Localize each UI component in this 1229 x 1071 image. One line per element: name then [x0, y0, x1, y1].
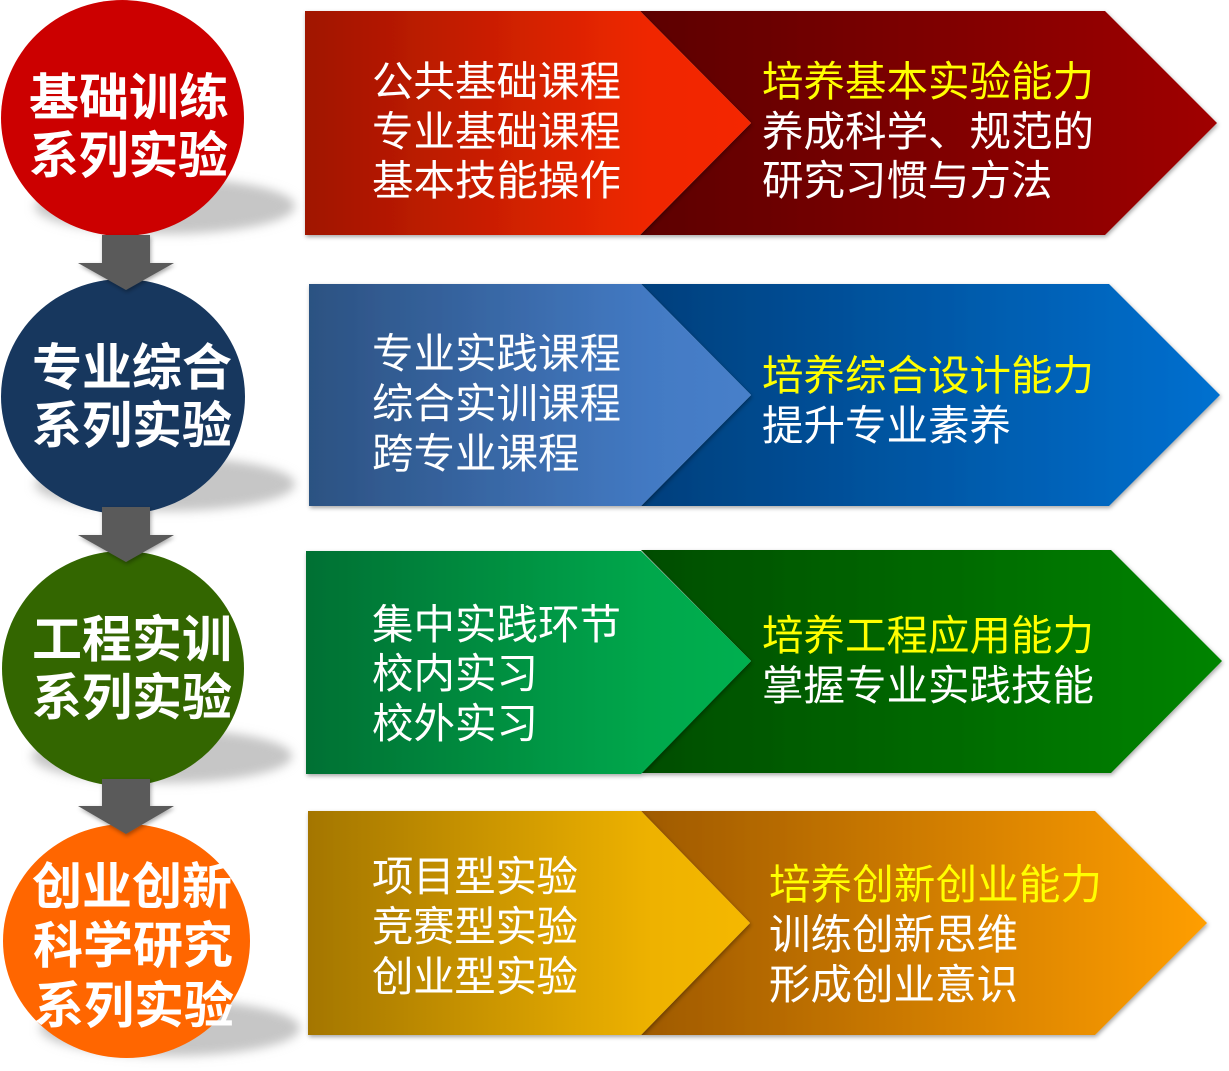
circle: 创业创新科学研究系列实验	[3, 824, 250, 1058]
circle: 创业创新科学研究系列实验: 科学研究	[33, 918, 233, 974]
panel: row 4 courses: 竞赛型实验	[372, 903, 578, 950]
panel: row 2 courses: 专业实践课程	[372, 330, 621, 377]
circle: 基础训练系列实验: 系列实验	[29, 128, 228, 184]
panel: row 3 courses: 集中实践环节	[372, 601, 621, 648]
arrow: step 3 to 4	[78, 779, 174, 834]
panel: row 2 goals	[641, 284, 1220, 506]
panel: row 3 goals: 培养工程应用能力	[762, 612, 1094, 659]
circle: 创业创新科学研究系列实验: 创业创新	[32, 859, 232, 915]
panel: row 3 goals: 掌握专业实践技能	[762, 662, 1094, 709]
arrow: step 1 to 2	[78, 235, 174, 290]
panel: row 4 courses	[308, 811, 750, 1035]
panel: row 4 goals: 训练创新思维	[769, 911, 1018, 958]
arrow: step 2 to 3	[78, 507, 174, 562]
panel: row 1 courses: 基本技能操作	[372, 157, 621, 204]
panel: row 2 courses: 跨专业课程	[372, 430, 580, 477]
shadow: circle 1	[35, 178, 295, 234]
shadow: circle 3	[32, 729, 292, 783]
panel: row 3 courses: 校外实习	[372, 700, 538, 747]
panel: row 3 courses: 校内实习	[372, 650, 538, 697]
panel: row 4 goals: 培养创新创业能力	[769, 861, 1102, 908]
panel: row 2 courses	[309, 284, 751, 506]
circle: 基础训练系列实验: 基础训练	[29, 70, 229, 126]
circle: 专业综合系列实验: 系列实验	[32, 398, 232, 454]
circle: 工程实训系列实验: 工程实训	[32, 612, 232, 668]
panel: row 3 goals	[641, 550, 1222, 773]
circle: 专业综合系列实验: 专业综合	[32, 340, 232, 396]
panel: row 4 courses: 创业型实验	[372, 953, 578, 1000]
panel: row 4 goals	[641, 811, 1207, 1035]
panel: row 1 courses: 公共基础课程	[372, 58, 621, 105]
shadow: circle 4	[40, 1000, 300, 1056]
panel: row 4 goals: 形成创业意识	[769, 961, 1018, 1008]
panel: row 1 goals: 养成科学、规范的	[762, 108, 1094, 155]
panel: row 1 goals	[640, 11, 1217, 235]
panel: row 1 goals: 培养基本实验能力	[762, 58, 1094, 105]
circle: 工程实训系列实验: 系列实验	[32, 670, 232, 726]
circle: 创业创新科学研究系列实验: 系列实验	[34, 978, 234, 1034]
circle: 专业综合系列实验	[1, 279, 245, 514]
panel: row 1 courses	[305, 11, 751, 235]
circle: 基础训练系列实验	[1, 0, 244, 236]
panel: row 2 courses: 综合实训课程	[372, 380, 621, 427]
panel: row 4 courses: 项目型实验	[372, 853, 578, 900]
panel: row 2 goals: 提升专业素养	[762, 402, 1011, 449]
panel: row 3 courses	[306, 551, 751, 774]
panel: row 2 goals: 培养综合设计能力	[762, 352, 1094, 399]
panel: row 1 goals: 研究习惯与方法	[762, 157, 1053, 204]
circle: 工程实训系列实验	[2, 551, 244, 786]
shadow: circle 2	[35, 457, 295, 511]
panel: row 1 courses: 专业基础课程	[372, 108, 621, 155]
